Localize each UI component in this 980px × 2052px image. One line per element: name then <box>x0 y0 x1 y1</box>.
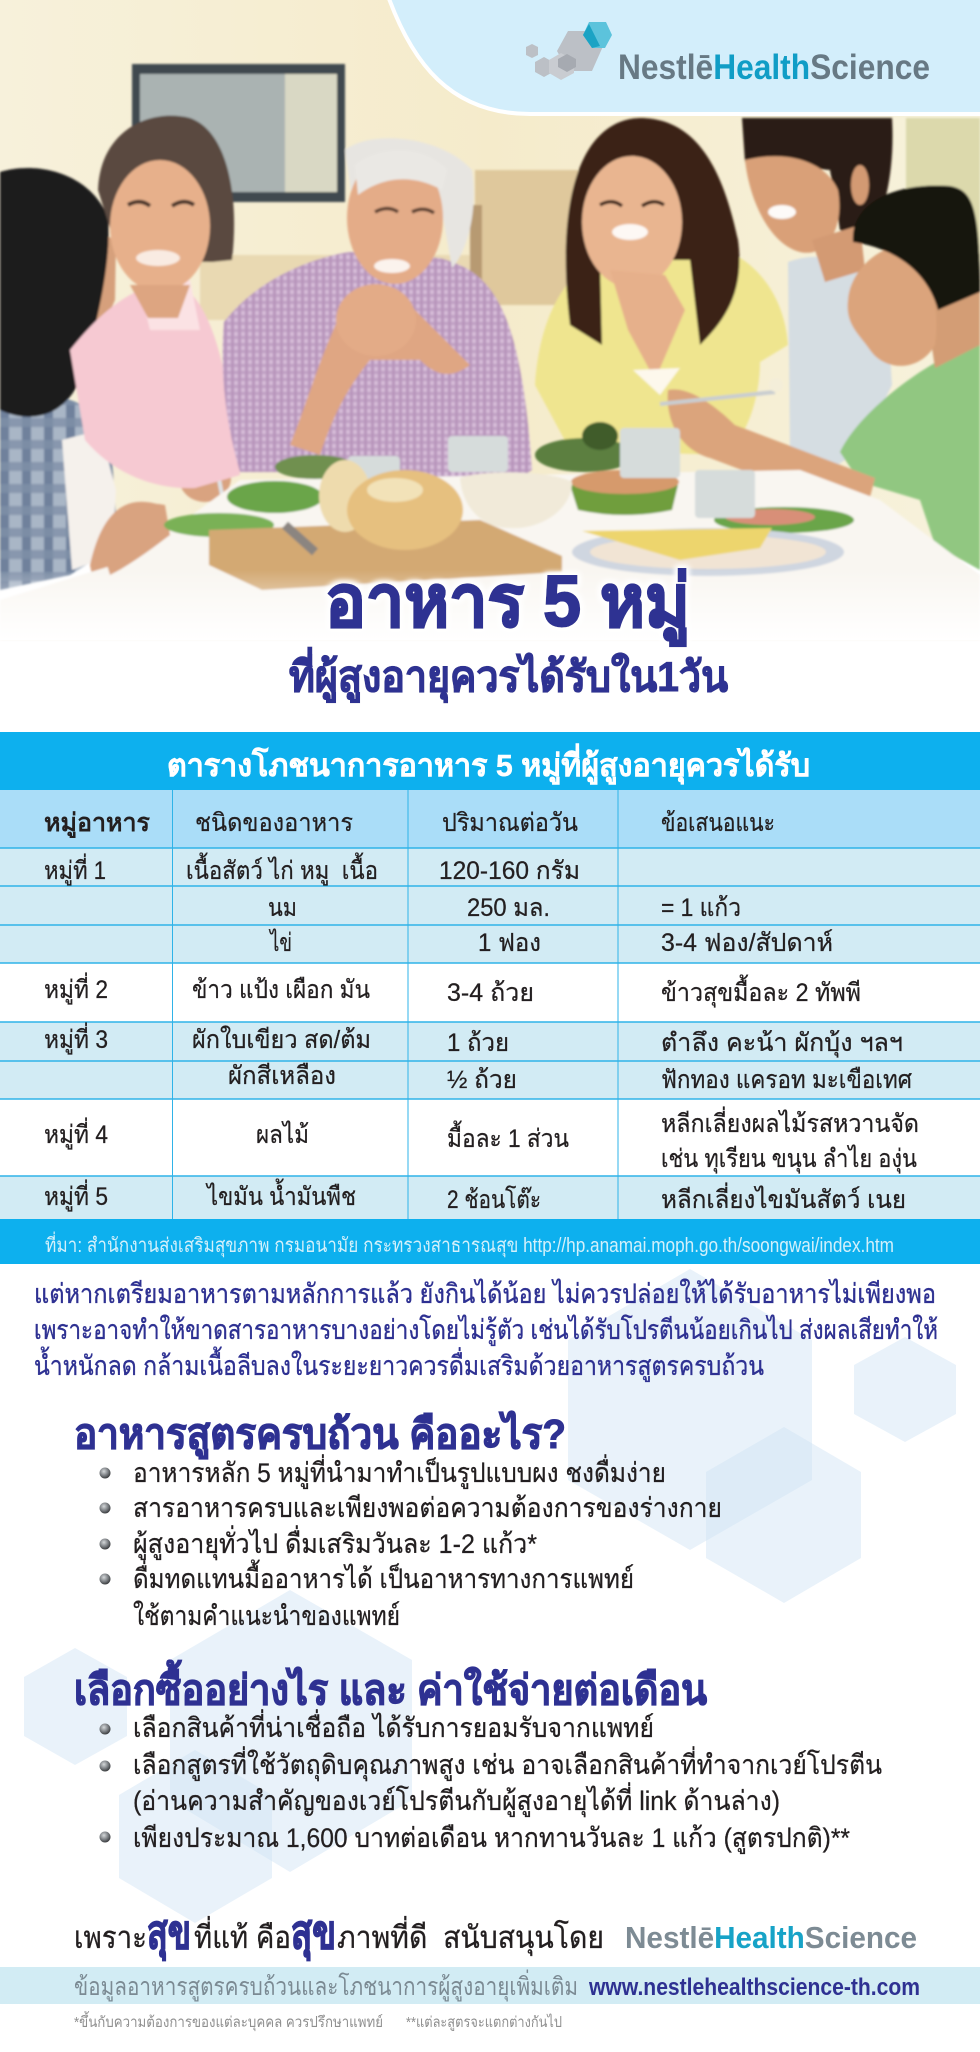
person: father <box>742 118 893 480</box>
light row backgrounds <box>0 848 980 1219</box>
slogan with sponsor: สุข <box>147 1906 191 1961</box>
row: group 1 milk <box>268 894 741 922</box>
bullet list <box>133 1709 882 1854</box>
row: group 1 milk: 250 มล. <box>467 894 550 922</box>
intro paragraph <box>34 1278 938 1382</box>
row: group 5 fats: ไขมัน น้ำมันพืช <box>205 1178 356 1211</box>
row: group 1 meat <box>44 852 580 886</box>
sponsor wordmark: NestlēHealthScience <box>625 1920 917 1955</box>
bullet list: เลือกสูตรที่ใช้วัตถุดิบคุณภาพสูง เช่น อาจเลือกสินค้าที่ทำจากเวย์โปรตีน <box>133 1746 882 1782</box>
row: group 1 meat: หมู่ที่ 1 <box>44 853 106 886</box>
footnotes <box>74 2011 562 2032</box>
row: group 5 fats: หลีกเลี่ยงไขมันสัตว์ เนย <box>661 1182 906 1214</box>
person: mother in yellow <box>535 118 788 455</box>
table grid lines <box>0 790 980 1219</box>
row: group 4 fruit: เช่น ทุเรียน ขนุน ลำไย องุ่น <box>661 1144 917 1174</box>
water glasses <box>348 428 755 518</box>
table header row background <box>0 790 980 848</box>
row: group 3 leafy greens: ผักใบเขียว สด/ต้ม <box>192 1025 371 1054</box>
panel: how to choose and monthly cost <box>74 1660 882 1854</box>
omelette plate <box>572 528 844 576</box>
bullet list: ใช้ตามคำแนะนำของแพทย์ <box>133 1600 400 1631</box>
person: boy in green <box>660 185 980 570</box>
table title: ตารางโภชนาการอาหาร 5 หมู่ที่ผู้สูงอายุควรได้รับ <box>167 743 810 785</box>
cutting board <box>209 520 562 590</box>
row: group 3 yellow vegetables <box>228 1062 912 1094</box>
more information band <box>0 1967 980 2004</box>
row: group 4 fruit: หลีกเลี่ยงผลไม้รสหวานจัด <box>661 1106 919 1138</box>
website address: www.nestlehealthscience-th.com <box>588 1974 920 2001</box>
table header labels: ปริมาณต่อวัน <box>442 809 578 837</box>
row: group 1 meat: เนื้อสัตว์ ไก่ หมู เนื้อ <box>186 852 378 886</box>
slogan with sponsor <box>74 1906 917 1961</box>
logo panel top right <box>388 0 980 114</box>
wooden cabinet <box>200 170 578 320</box>
person: grandmother <box>70 116 240 488</box>
photo background: room wall <box>0 0 980 560</box>
panel: what is complete nutrition <box>74 1410 722 1631</box>
row: group 3 yellow vegetables: ฟักทอง แครอท มะเขือเทศ <box>661 1066 912 1094</box>
row: group 3 yellow vegetables: ผักสีเหลือง <box>228 1062 336 1090</box>
bullet markers <box>100 1468 110 1584</box>
table header labels: หมู่อาหาร <box>44 809 151 839</box>
row: group 4 fruit: หมู่ที่ 4 <box>44 1117 108 1150</box>
row: group 1 milk: = 1 แก้ว <box>661 894 741 922</box>
bullet list: ดื่มทดแทนมื้ออาหารได้ เป็นอาหารทางการแพทย์ <box>133 1559 634 1594</box>
row: group 4 fruit: ผลไม้ <box>256 1120 309 1149</box>
wall television <box>132 64 345 202</box>
white row backgrounds <box>0 963 980 1176</box>
bullet markers <box>100 1724 110 1842</box>
background hexagons <box>24 1269 956 1923</box>
light blue curved panel <box>388 0 980 114</box>
title line one: อาหาร 5 หมู่ <box>325 562 690 647</box>
slogan with sponsor: เพราะ <box>74 1920 147 1955</box>
bullet list: สารอาหารครบและเพียงพอต่อความต้องการของร่างกาย <box>133 1493 722 1523</box>
row: group 2: ข้าวสุขมื้อละ 2 ทัพพี <box>661 974 861 1008</box>
footnotes: *ขึ้นกับความต้องการของแต่ละบุคคล ควรปรึกษาแพทย์ <box>74 2011 383 2032</box>
bullet list: ผู้สูงอายุทั่วไป ดื่มเสริมวันละ 1-2 แก้ว* <box>133 1525 537 1561</box>
bullet list: เลือกสินค้าที่น่าเชื่อถือ ได้รับการยอมรับจากแพทย์ <box>133 1709 654 1743</box>
table source band <box>0 1219 980 1264</box>
bullet list: เพียงประมาณ 1,600 บาทต่อเดือน หากทานวันละ 1 แก้ว (สูตรปกติ)** <box>133 1823 850 1854</box>
bread <box>319 460 463 550</box>
row: group 5 fats: หมู่ที่ 5 <box>44 1179 108 1212</box>
panel: hero photo of family at the table <box>0 0 980 640</box>
panel: nutrition table <box>0 732 980 1264</box>
row: group 3 yellow vegetables: ½ ถ้วย <box>447 1066 517 1094</box>
row: group 2: ข้าว แป้ง เผือก มัน <box>192 976 370 1004</box>
table header labels <box>44 809 775 839</box>
heading: เลือกซื้ออย่างไร และ ค่าใช้จ่ายต่อเดือน <box>74 1660 707 1713</box>
more information label: ข้อมูลอาหารสูตรครบถ้วนและโภชนาการผู้สูงอายุเพิ่มเติม <box>74 1969 578 2002</box>
dining table <box>0 470 980 640</box>
row: group 1 egg: 3-4 ฟอง/สัปดาห์ <box>661 929 833 957</box>
row: group 1 milk: นม <box>268 894 297 922</box>
table title band <box>0 732 980 790</box>
row: group 1 egg <box>269 928 833 957</box>
slogan with sponsor: ที่แท้ คือ <box>194 1916 291 1955</box>
person: grandfather <box>223 138 532 492</box>
photo content: family and food <box>0 64 980 640</box>
bullet list: อาหารหลัก 5 หมู่ที่นำมาทำเป็นรูปแบบผง ชงดื่มง่าย <box>133 1454 666 1489</box>
row: group 4 fruit <box>44 1106 919 1174</box>
knife on board <box>285 525 315 552</box>
table header labels: ข้อเสนอแนะ <box>661 809 775 837</box>
row: group 1 egg: ไข่ <box>269 928 292 957</box>
row: group 3 leafy greens: 1 ถ้วย <box>447 1029 509 1057</box>
table header labels: ชนิดของอาหาร <box>195 809 353 837</box>
person: girl at left <box>0 168 231 590</box>
row: group 3 leafy greens: หมู่ที่ 3 <box>44 1022 108 1055</box>
bullet list <box>133 1454 722 1631</box>
row: group 1 egg: 1 ฟอง <box>478 929 541 957</box>
bullet list: (อ่านความสำคัญของเวย์โปรตีนกับผู้สูงอายุได้ที่ link ด้านล่าง) <box>133 1782 780 1818</box>
row: group 5 fats <box>44 1178 906 1214</box>
heading: อาหารสูตรครบถ้วน คืออะไร? <box>74 1410 566 1460</box>
logo wordmark: NestlēHealthScience <box>618 48 930 87</box>
photo bottom fade into white <box>0 570 980 640</box>
intro paragraph: น้ำหนักลด กล้ามเนื้อลีบลงในระยะยาวควรดื่มเสริมด้วยอาหารสูตรครบถ้วน <box>34 1346 764 1382</box>
slogan with sponsor: สุข <box>291 1906 336 1961</box>
row: group 2 <box>44 972 861 1008</box>
forearm resting on table <box>100 504 170 575</box>
icon: logo hexagons <box>526 22 612 80</box>
food: salads and green plates <box>164 422 854 537</box>
row: group 2: 3-4 ถ้วย <box>447 979 534 1007</box>
title line two: ที่ผู้สูงอายุควรได้รับใน1วัน <box>289 647 728 703</box>
row: group 5 fats: 2 ช้อนโต๊ะ <box>447 1185 541 1214</box>
footnotes: **แต่ละสูตรจะแตกต่างกันไป <box>406 2013 562 2031</box>
bowl of rice <box>460 472 572 528</box>
row: group 1 meat: 120-160 กรัม <box>439 857 580 885</box>
main title <box>289 562 728 703</box>
window <box>906 118 980 308</box>
row: group 3 leafy greens <box>44 1022 903 1058</box>
row: group 3 leafy greens: ตำลึง คะน้า ผักบุ้ง ฯลฯ <box>661 1029 903 1058</box>
row: group 2: หมู่ที่ 2 <box>44 972 108 1005</box>
row: group 4 fruit: มื้อละ 1 ส่วน <box>447 1120 569 1153</box>
slogan with sponsor: ภาพที่ดี สนับสนุนโดย <box>337 1916 604 1957</box>
